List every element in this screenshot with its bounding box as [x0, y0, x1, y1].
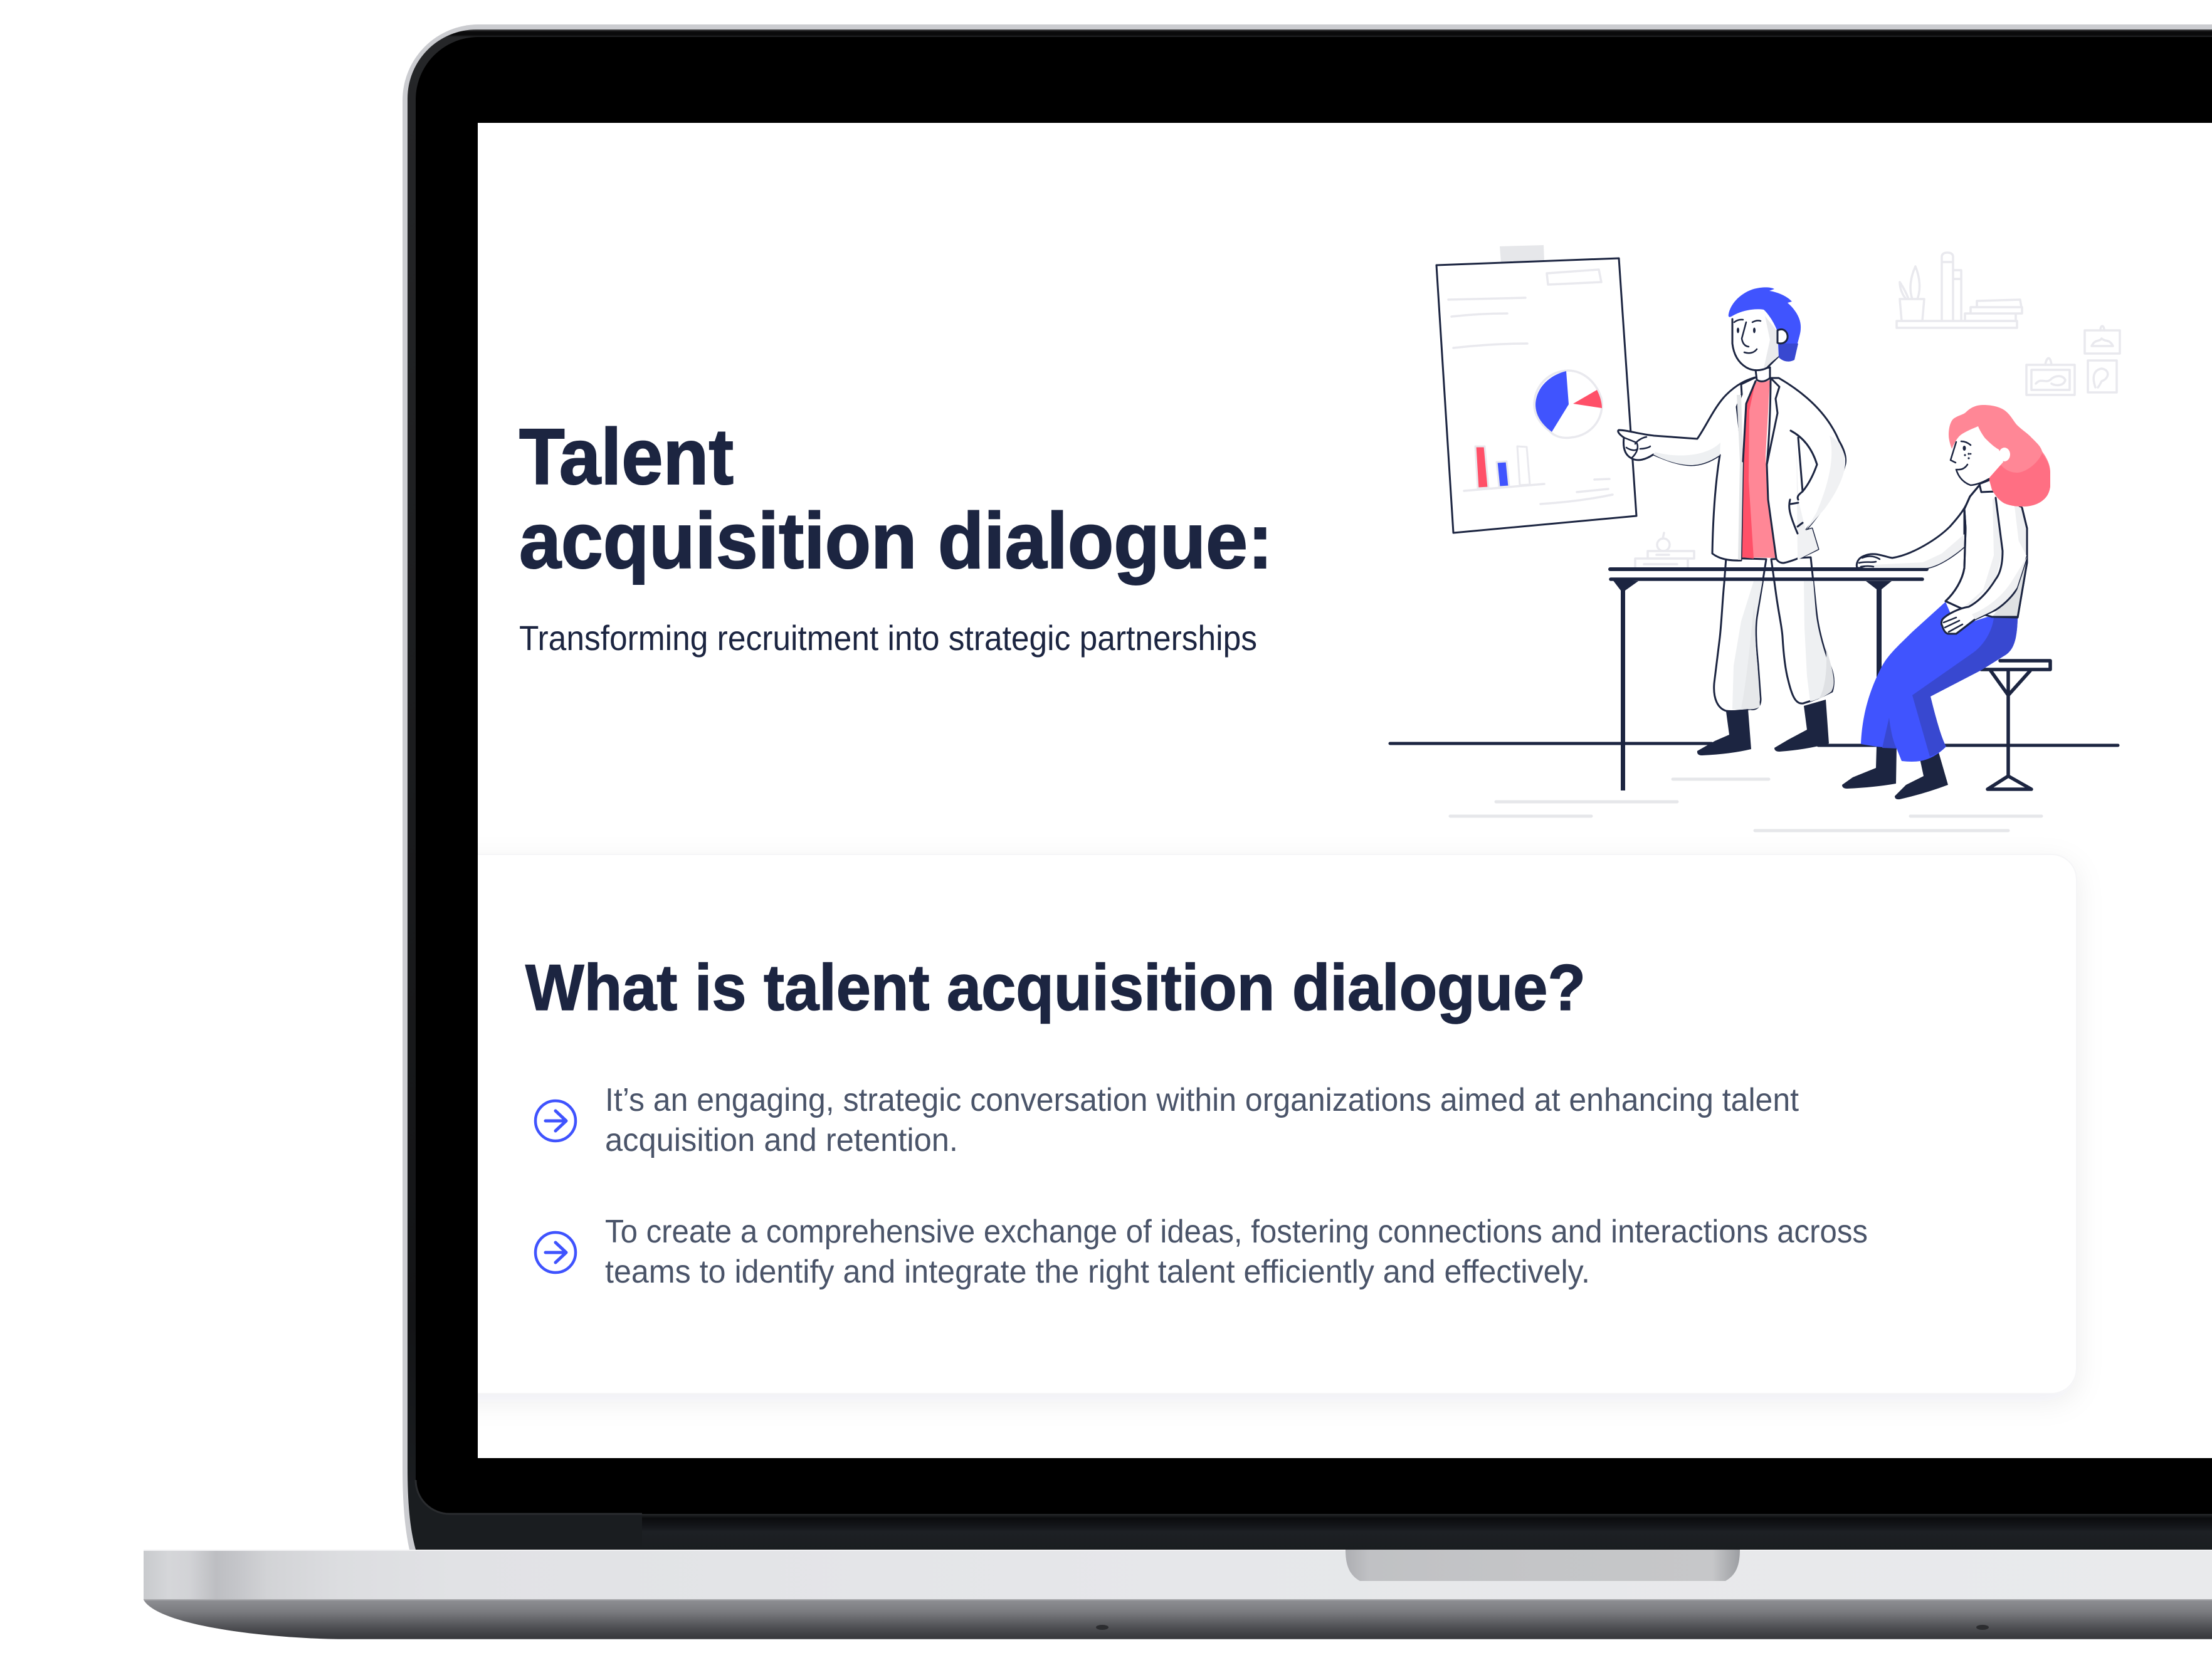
woman: trousers — [1861, 602, 2018, 762]
man: trousers — [1714, 557, 1834, 711]
title: Talent — [519, 412, 734, 501]
poster — [1436, 245, 1636, 533]
man: lab coat — [1618, 377, 1846, 563]
laptop screen — [401, 123, 2212, 1458]
subtitle: Transforming recruitment into strategic partnerships — [519, 618, 1257, 658]
laptop base — [144, 1550, 2212, 1639]
woman: boots — [1842, 746, 1948, 799]
woman figure — [1842, 405, 2050, 799]
title: acquisition dialogue: — [519, 496, 1273, 585]
woman: collar — [1979, 480, 1995, 492]
decor: shelf with plant and books — [1897, 253, 2022, 328]
floor shadow lines — [1450, 779, 2041, 831]
laptop lid — [403, 24, 2212, 1550]
woman: hair and face — [1949, 405, 2050, 507]
table — [1610, 569, 1927, 790]
man: neck and head — [1729, 287, 1801, 381]
stool — [1981, 661, 2050, 789]
man: shirt — [1741, 380, 1776, 559]
title — [519, 412, 1273, 585]
man: boots — [1697, 700, 1829, 755]
man figure — [1618, 287, 1846, 755]
card heading: What is talent acquisition dialogue? — [525, 952, 1586, 1024]
icon: arrow bullet two — [535, 1232, 576, 1273]
bullet text one — [605, 1082, 1799, 1158]
icon: arrow bullet one — [535, 1101, 576, 1141]
chart: bars on poster — [1475, 446, 1530, 488]
floor line — [1390, 743, 2118, 745]
chart: pie on poster — [1534, 370, 1602, 438]
decor: apple and books on table — [1635, 533, 1694, 568]
bullet text one: It’s an engaging, strategic conversation within organizations aimed at enhancing talent — [605, 1082, 1799, 1118]
bullet text one: acquisition and retention. — [605, 1122, 958, 1158]
bullet text two: teams to identify and integrate the right talent efficiently and effectively. — [605, 1254, 1590, 1290]
bullet text two: To create a comprehensive exchange of ideas, fostering connections and interactions across — [605, 1214, 1868, 1250]
decor: wall frames — [2026, 326, 2120, 395]
illustration: presentation scene — [1390, 245, 2120, 831]
woman: torso and arms — [1856, 485, 2027, 634]
bullet text two — [605, 1214, 1868, 1290]
